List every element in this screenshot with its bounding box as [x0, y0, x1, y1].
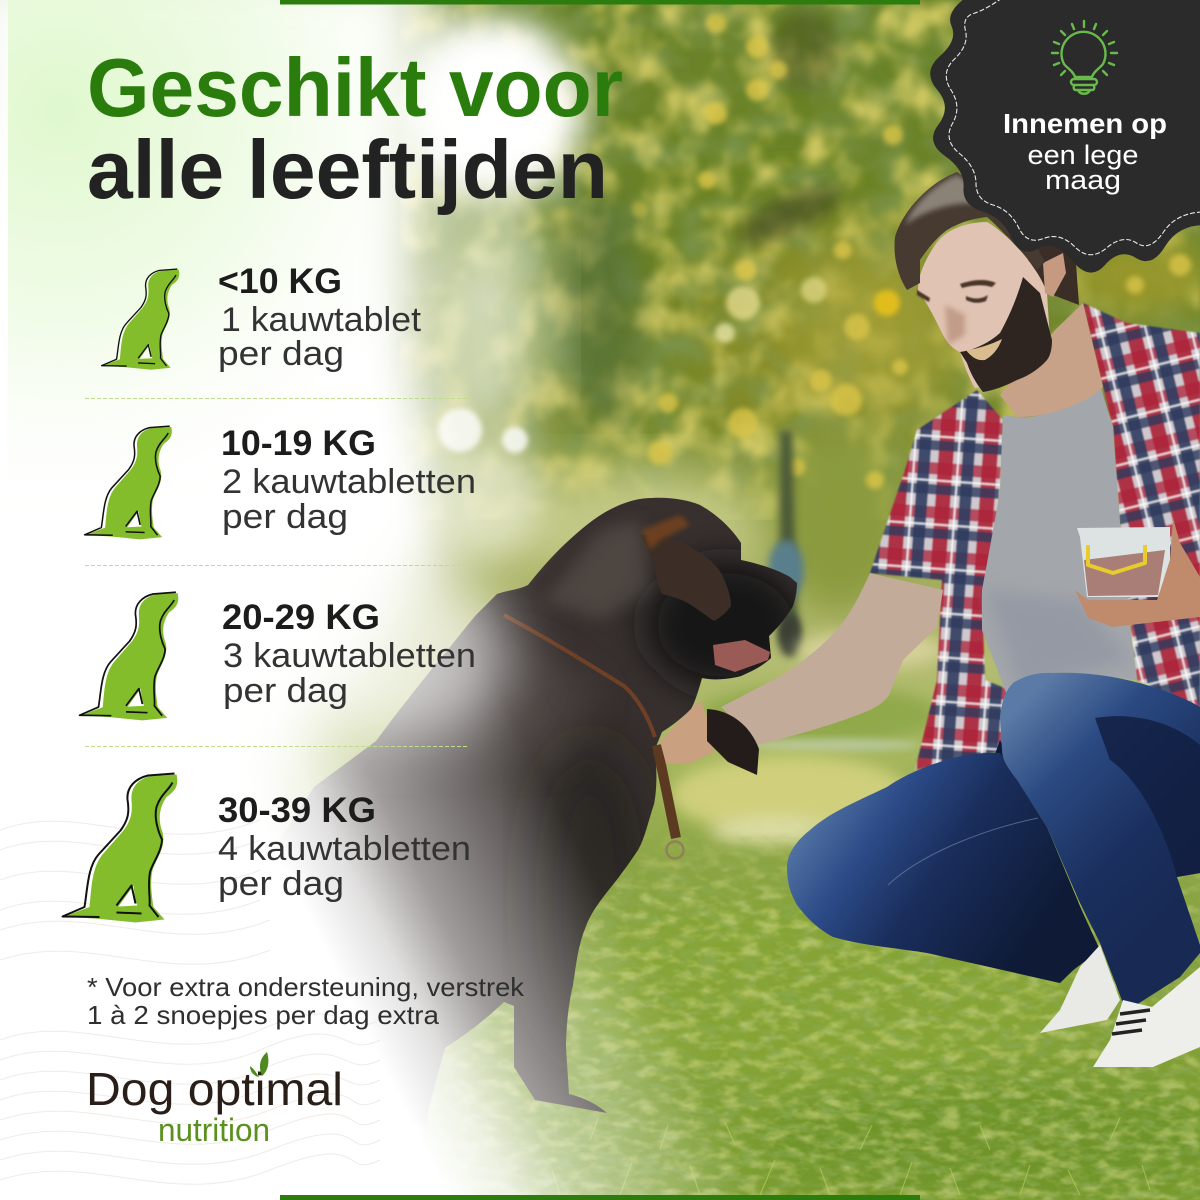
man: hair	[894, 172, 1045, 290]
text: 10-19 kg dose: 10-19 KG	[221, 424, 376, 463]
man: brows and eyes	[917, 280, 996, 303]
dog: ear	[641, 535, 731, 621]
bottom green bar	[280, 1195, 920, 1200]
man: shoelaces	[1112, 1010, 1150, 1034]
man: forearm	[721, 573, 943, 745]
dog: open mouth	[713, 640, 770, 672]
badge text: een lege	[1028, 140, 1138, 170]
text: under 10 kg dose: 1 kauwtablet	[221, 301, 422, 339]
text: 20-29 kg dose: per dag	[223, 672, 348, 710]
man: plaid shirt right panel	[1083, 303, 1200, 710]
text: 10-19 kg dose: per dag	[222, 498, 348, 536]
icon: light bulb	[1052, 21, 1117, 94]
text: 20-29 kg dose	[222, 598, 476, 710]
logo: Dog optimal nutrition	[86, 1052, 343, 1148]
title: alle leeftijden	[87, 123, 608, 216]
top green bar	[280, 0, 920, 4]
dosage row: under 10 kg	[102, 262, 422, 373]
white panel behind text	[0, 0, 465, 830]
icon: medium-small dog	[85, 426, 172, 539]
man: ear	[1043, 253, 1066, 297]
icon: large dog	[62, 774, 177, 922]
man: face	[918, 222, 1050, 388]
text: 20-29 kg dose: 3 kauwtabletten	[223, 637, 476, 675]
photo: dark labrador	[280, 498, 805, 1125]
man: front shoe	[1093, 967, 1200, 1067]
text: 10-19 kg dose: 2 kauwtabletten	[222, 463, 476, 501]
bokeh highlights	[438, 408, 528, 453]
text: under 10 kg dose	[218, 262, 422, 373]
logo: Dog optimal nutrition: nutrition	[158, 1112, 270, 1148]
text: under 10 kg dose: per dag	[218, 335, 344, 373]
badge text: maag	[1045, 165, 1121, 195]
dosage row: 10-19 kg	[85, 424, 476, 539]
text: 20-29 kg dose: 20-29 KG	[222, 598, 380, 637]
dosage row: 30-39 kg	[62, 774, 471, 922]
text: under 10 kg dose: <10 KG	[218, 262, 342, 301]
man: nose shadow	[945, 305, 965, 345]
man: neck	[1000, 303, 1103, 417]
man: right leg jeans	[1000, 673, 1200, 1007]
footnote	[87, 972, 525, 1030]
extra fade over dog back	[280, 560, 510, 740]
badge: wavy dark shape	[930, 0, 1200, 273]
photo: man crouching	[721, 172, 1200, 1067]
footnote: 1 à 2 snoepjes per dag extra	[87, 1000, 440, 1030]
man: back thigh shadow	[1095, 716, 1200, 877]
text: 30-39 kg dose: per dag	[218, 865, 344, 903]
man: dark underlay between legs	[950, 740, 1100, 980]
man: right hand	[1075, 518, 1200, 627]
man: grey t-shirt	[982, 385, 1137, 695]
badge text: Innemen op	[1003, 108, 1167, 139]
man: hand holding paw	[660, 700, 714, 764]
badge: take on empty stomach	[930, 0, 1200, 273]
man: plaid shirt left panel and sleeve	[870, 390, 1010, 770]
dog: collar and leash	[504, 615, 684, 858]
man: back shoe	[1040, 945, 1120, 1033]
footnote: * Voor extra ondersteuning, verstrek	[87, 972, 525, 1002]
man: left leg jeans	[787, 753, 1097, 983]
pale haze below the gap	[425, 190, 545, 450]
title: Geschikt voor	[87, 41, 623, 134]
man: beard	[960, 277, 1052, 392]
text: 30-39 kg dose: 4 kauwtabletten	[218, 830, 471, 868]
man: back hair	[1020, 240, 1079, 305]
icon: small dog	[102, 269, 179, 370]
badge text	[1003, 108, 1167, 195]
man: mouth	[966, 339, 1002, 360]
dog: body	[280, 498, 797, 1125]
mint tint upper left	[8, 0, 508, 560]
logo: Dog optimal nutrition: Dog optimal	[86, 1063, 343, 1115]
title	[87, 41, 623, 216]
man: container with treats	[1077, 527, 1170, 597]
dog: shading clipped to silhouette	[440, 520, 805, 1060]
man: lower shirt shadow	[985, 590, 1130, 690]
white haze in tree gap	[395, 15, 585, 205]
icon: medium dog	[80, 592, 178, 720]
logo: leaf	[250, 1052, 268, 1077]
dog: brown fur on forehead	[642, 515, 690, 550]
text: 10-19 kg dose	[221, 424, 476, 536]
man: jeans seam	[888, 818, 1038, 885]
man: light hair on top	[905, 175, 985, 225]
text: 30-39 kg dose: 30-39 KG	[218, 791, 376, 830]
dosage row: 20-29 kg	[80, 592, 476, 720]
wavy line texture	[0, 820, 380, 1184]
text: 30-39 kg dose	[218, 791, 471, 903]
badge: dashed stitch line	[946, 0, 1200, 255]
dog: raised paw	[707, 709, 759, 775]
pale haze at mid left	[435, 440, 545, 560]
